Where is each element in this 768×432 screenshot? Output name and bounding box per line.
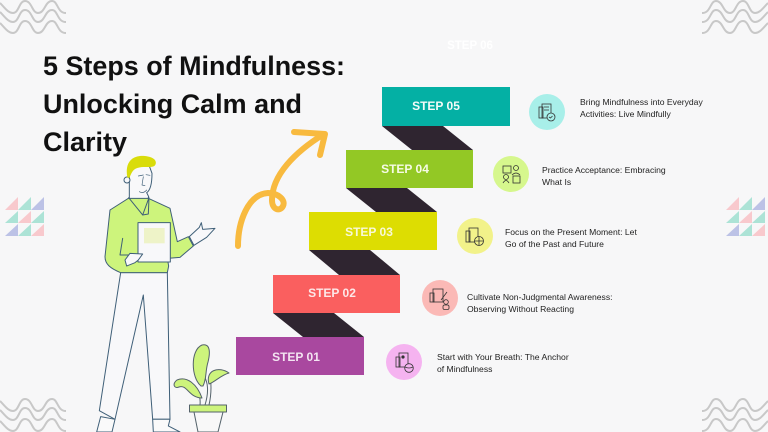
step 02 bar — [273, 275, 400, 313]
icon: step 02 — [422, 280, 458, 316]
icon: step 01 — [386, 344, 422, 380]
icon: step 04 — [493, 156, 529, 192]
step 04 description — [542, 165, 666, 187]
man: sweater — [105, 198, 193, 273]
step 05 bar: STEP 05 — [412, 99, 460, 113]
decorative waves: top left — [0, 1, 66, 33]
step 01 bar — [236, 337, 364, 375]
step 04 bar: STEP 04 — [381, 162, 429, 176]
faint step 06 label: STEP 06 — [447, 40, 493, 52]
decorative waves: bottom right — [702, 399, 768, 431]
step 04 bar — [346, 150, 473, 188]
man: hands — [125, 253, 143, 266]
man: trousers — [99, 273, 170, 419]
step 04 description: Practice Acceptance: Embracing — [542, 165, 666, 175]
step 01 description — [437, 352, 569, 374]
step 05 bar — [382, 87, 510, 126]
man: arm crease — [120, 238, 135, 255]
plant: leaves — [174, 345, 229, 398]
arrow: curved yellow — [238, 132, 325, 246]
illustration: potted plant — [174, 345, 229, 432]
step 03 description: Go of the Past and Future — [505, 239, 604, 249]
step 05 description: Bring Mindfulness into Everyday — [580, 97, 703, 107]
man: shoes — [97, 417, 180, 432]
step 05 description: Activities: Live Mindfully — [580, 109, 671, 119]
step 03 bar — [309, 212, 437, 250]
title: Unlocking Calm and — [43, 89, 302, 119]
decorative triangles: right — [726, 197, 765, 236]
plant: pot — [194, 412, 223, 432]
man: face detail — [138, 175, 150, 193]
illustration: man presenting — [97, 156, 215, 432]
decorative waves: top right — [702, 1, 768, 33]
step 01 description: Start with Your Breath: The Anchor — [437, 352, 569, 362]
title: 5 Steps of Mindfulness: — [43, 51, 345, 81]
icon: step 05 — [529, 94, 565, 130]
step 01 description: of Mindfulness — [437, 364, 492, 374]
decorative waves: bottom left — [0, 399, 66, 431]
decorative triangles: left — [5, 197, 44, 236]
step 03 bar: STEP 03 — [345, 225, 393, 239]
plant: stems — [193, 376, 211, 405]
step 02 bar: STEP 02 — [308, 286, 356, 300]
man: hair — [127, 156, 156, 178]
step 03 description — [505, 227, 637, 249]
step 02 description — [467, 292, 613, 314]
step 05 description — [580, 97, 703, 119]
man: clipboard — [138, 223, 170, 262]
step 02 description: Cultivate Non-Judgmental Awareness: — [467, 292, 613, 302]
man: neck and head — [129, 163, 152, 212]
staircase connectors — [273, 126, 473, 337]
step 03 description: Focus on the Present Moment: Let — [505, 227, 637, 237]
man: collar — [129, 198, 149, 215]
step 04 description: What Is — [542, 177, 571, 187]
title — [43, 51, 345, 157]
icon: step 03 — [457, 218, 493, 254]
title: Clarity — [43, 127, 127, 157]
step 01 bar: STEP 01 — [272, 350, 320, 364]
step 02 description: Observing Without Reacting — [467, 304, 574, 314]
